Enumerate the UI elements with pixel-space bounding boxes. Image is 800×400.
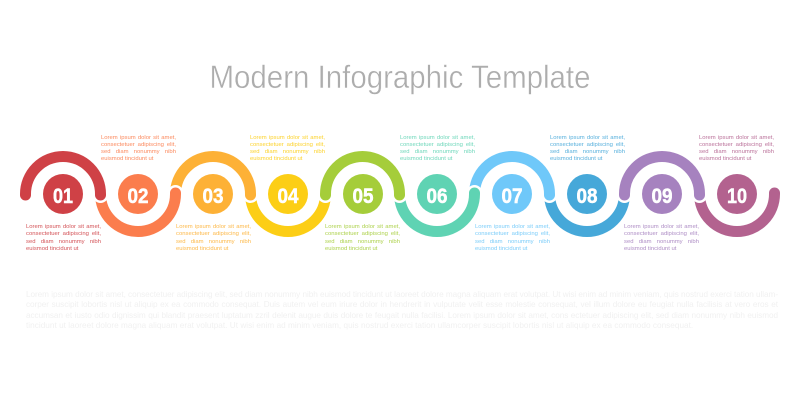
body paragraph — [26, 290, 778, 330]
text block 07: Lorem ipsum dolor sit amet, — [475, 224, 550, 230]
text block 10: consectetuer adipiscing elit, — [699, 142, 774, 148]
badge 05 — [343, 174, 383, 214]
text block 02: euismod tincidunt ut — [101, 156, 153, 162]
badge 03: 03 — [202, 185, 224, 208]
text block 10: sed diam nonummy nibh — [699, 149, 774, 155]
body paragraph: accumsan et iusto odio dignissim qui blandit praesent luptatum zzril delenit augue duis dolore te feugait nulla facilisi. Lorem ipsum dolor sit amet, cons ectetuer adipiscing elit, sed diam nonummy nibh euismod — [26, 311, 778, 320]
arc 02 — [100, 193, 176, 232]
badge 02: 02 — [128, 185, 148, 208]
badge 08 — [567, 174, 607, 214]
badge 08: 08 — [576, 185, 598, 208]
arc 07 — [474, 157, 550, 195]
text block 07 — [475, 224, 550, 252]
text block 02: Lorem ipsum dolor sit amet, — [101, 134, 176, 140]
text block 03 — [176, 224, 251, 252]
text block 05: consectetuer adipiscing elit, — [325, 231, 400, 237]
text block 05: Lorem ipsum dolor sit amet, — [325, 224, 400, 230]
text block 07: euismod tincidunt ut — [475, 246, 527, 252]
text block 09: consectetuer adipiscing elit, — [624, 231, 699, 237]
text block 04: Lorem ipsum dolor sit amet, — [250, 134, 325, 140]
text block 07: consectetuer adipiscing elit, — [475, 231, 550, 237]
text block 08: euismod tincidunt ut — [550, 156, 602, 162]
badge 06: 06 — [426, 185, 448, 208]
text block 03: consectetuer adipiscing elit, — [176, 231, 251, 237]
text block 09: euismod tincidunt ut — [624, 246, 676, 252]
badge 05: 05 — [352, 185, 374, 208]
badge 09: 09 — [652, 185, 672, 208]
badge 07: 07 — [502, 185, 522, 208]
text block 04: euismod tincidunt ut — [250, 156, 302, 162]
text block 02: sed diam nonummy nibh — [101, 149, 176, 155]
arc 01 — [26, 157, 100, 195]
arc 04 — [250, 193, 326, 232]
text block 10 — [699, 134, 774, 162]
text block 05: sed diam nonummy nibh — [325, 238, 400, 244]
arc 10 — [700, 193, 774, 232]
arc 09 — [624, 157, 700, 195]
arc 06 — [400, 193, 474, 232]
text block 09: sed diam nonummy nibh — [624, 238, 699, 244]
badge 07 — [492, 174, 532, 214]
badge 04: 04 — [278, 185, 299, 208]
arc 08 — [550, 193, 624, 232]
badge 09 — [642, 174, 682, 214]
badge 04 — [268, 174, 308, 214]
text block 01: Lorem ipsum dolor sit amet, — [26, 224, 101, 230]
text block 06: consectetuer adipiscing elit, — [400, 142, 475, 148]
badge 02 — [118, 174, 158, 214]
text block 02 — [101, 134, 176, 162]
body paragraph: corper suscipit lobortis nisl ut aliquip ex ea commodo consequat. Duis autem vel eum iriure dolor in hendrerit in vulputate velit esse molestie consequat, vel illum dolore eu feugiat nulla facilisis at vero eros et — [26, 300, 778, 309]
text block 06: sed diam nonummy nibh — [400, 149, 475, 155]
text block 09 — [624, 224, 699, 252]
badge 10: 10 — [727, 185, 747, 208]
text block 10: Lorem ipsum dolor sit amet, — [699, 134, 774, 140]
text block 03: euismod tincidunt ut — [176, 246, 228, 252]
arc 03 — [176, 157, 250, 195]
text block 07: sed diam nonummy nibh — [475, 238, 550, 244]
text block 01: consectetuer adipiscing elit, — [26, 231, 101, 237]
text block 05: euismod tincidunt ut — [325, 246, 377, 252]
text block 08 — [550, 134, 625, 162]
body paragraph: Lorem ipsum dolor sit amet, consectetuer adipiscing elit, sed diam nonummy nibh euismod tincidunt ut laoreet dolore magna aliquam erat volutpat. Ut wisi enim ad minim veniam, quis nostrud exerci tation ullam- — [26, 290, 778, 299]
text block 03: Lorem ipsum dolor sit amet, — [176, 224, 251, 230]
text block 08: consectetuer adipiscing elit, — [550, 142, 625, 148]
badge 06 — [417, 174, 457, 214]
arc 05 — [326, 157, 400, 195]
text block 08: sed diam nonummy nibh — [550, 149, 625, 155]
text block 09: Lorem ipsum dolor sit amet, — [624, 224, 699, 230]
text block 08: Lorem ipsum dolor sit amet, — [550, 134, 625, 140]
text block 01: sed diam nonummy nibh — [26, 238, 101, 244]
badge 03 — [193, 174, 233, 214]
text block 01 — [26, 224, 101, 252]
text block 04: consectetuer adipiscing elit, — [250, 142, 325, 148]
title: Modern Infographic Template — [210, 59, 590, 95]
text block 04 — [250, 134, 325, 162]
text block 03: sed diam nonummy nibh — [176, 238, 251, 244]
text block 02: consectetuer adipiscing elit, — [101, 142, 176, 148]
text block 06: Lorem ipsum dolor sit amet, — [400, 134, 475, 140]
body paragraph: tincidunt ut laoreet dolore magna aliquam erat volutpat. Ut wisi enim ad minim veniam, quis nostrud exerci tation ullamcorper suscipit lobortis nisl ut aliquip ex ea commodo consequat. — [26, 321, 693, 330]
text block 06 — [400, 134, 475, 162]
text block 06: euismod tincidunt ut — [400, 156, 452, 162]
badge 10 — [717, 174, 757, 214]
badge 01 — [43, 174, 83, 214]
badge 01: 01 — [53, 185, 73, 208]
text block 04: sed diam nonummy nibh — [250, 149, 325, 155]
text block 01: euismod tincidunt ut — [26, 246, 78, 252]
text block 10: euismod tincidunt ut — [699, 156, 751, 162]
text block 05 — [325, 224, 400, 252]
